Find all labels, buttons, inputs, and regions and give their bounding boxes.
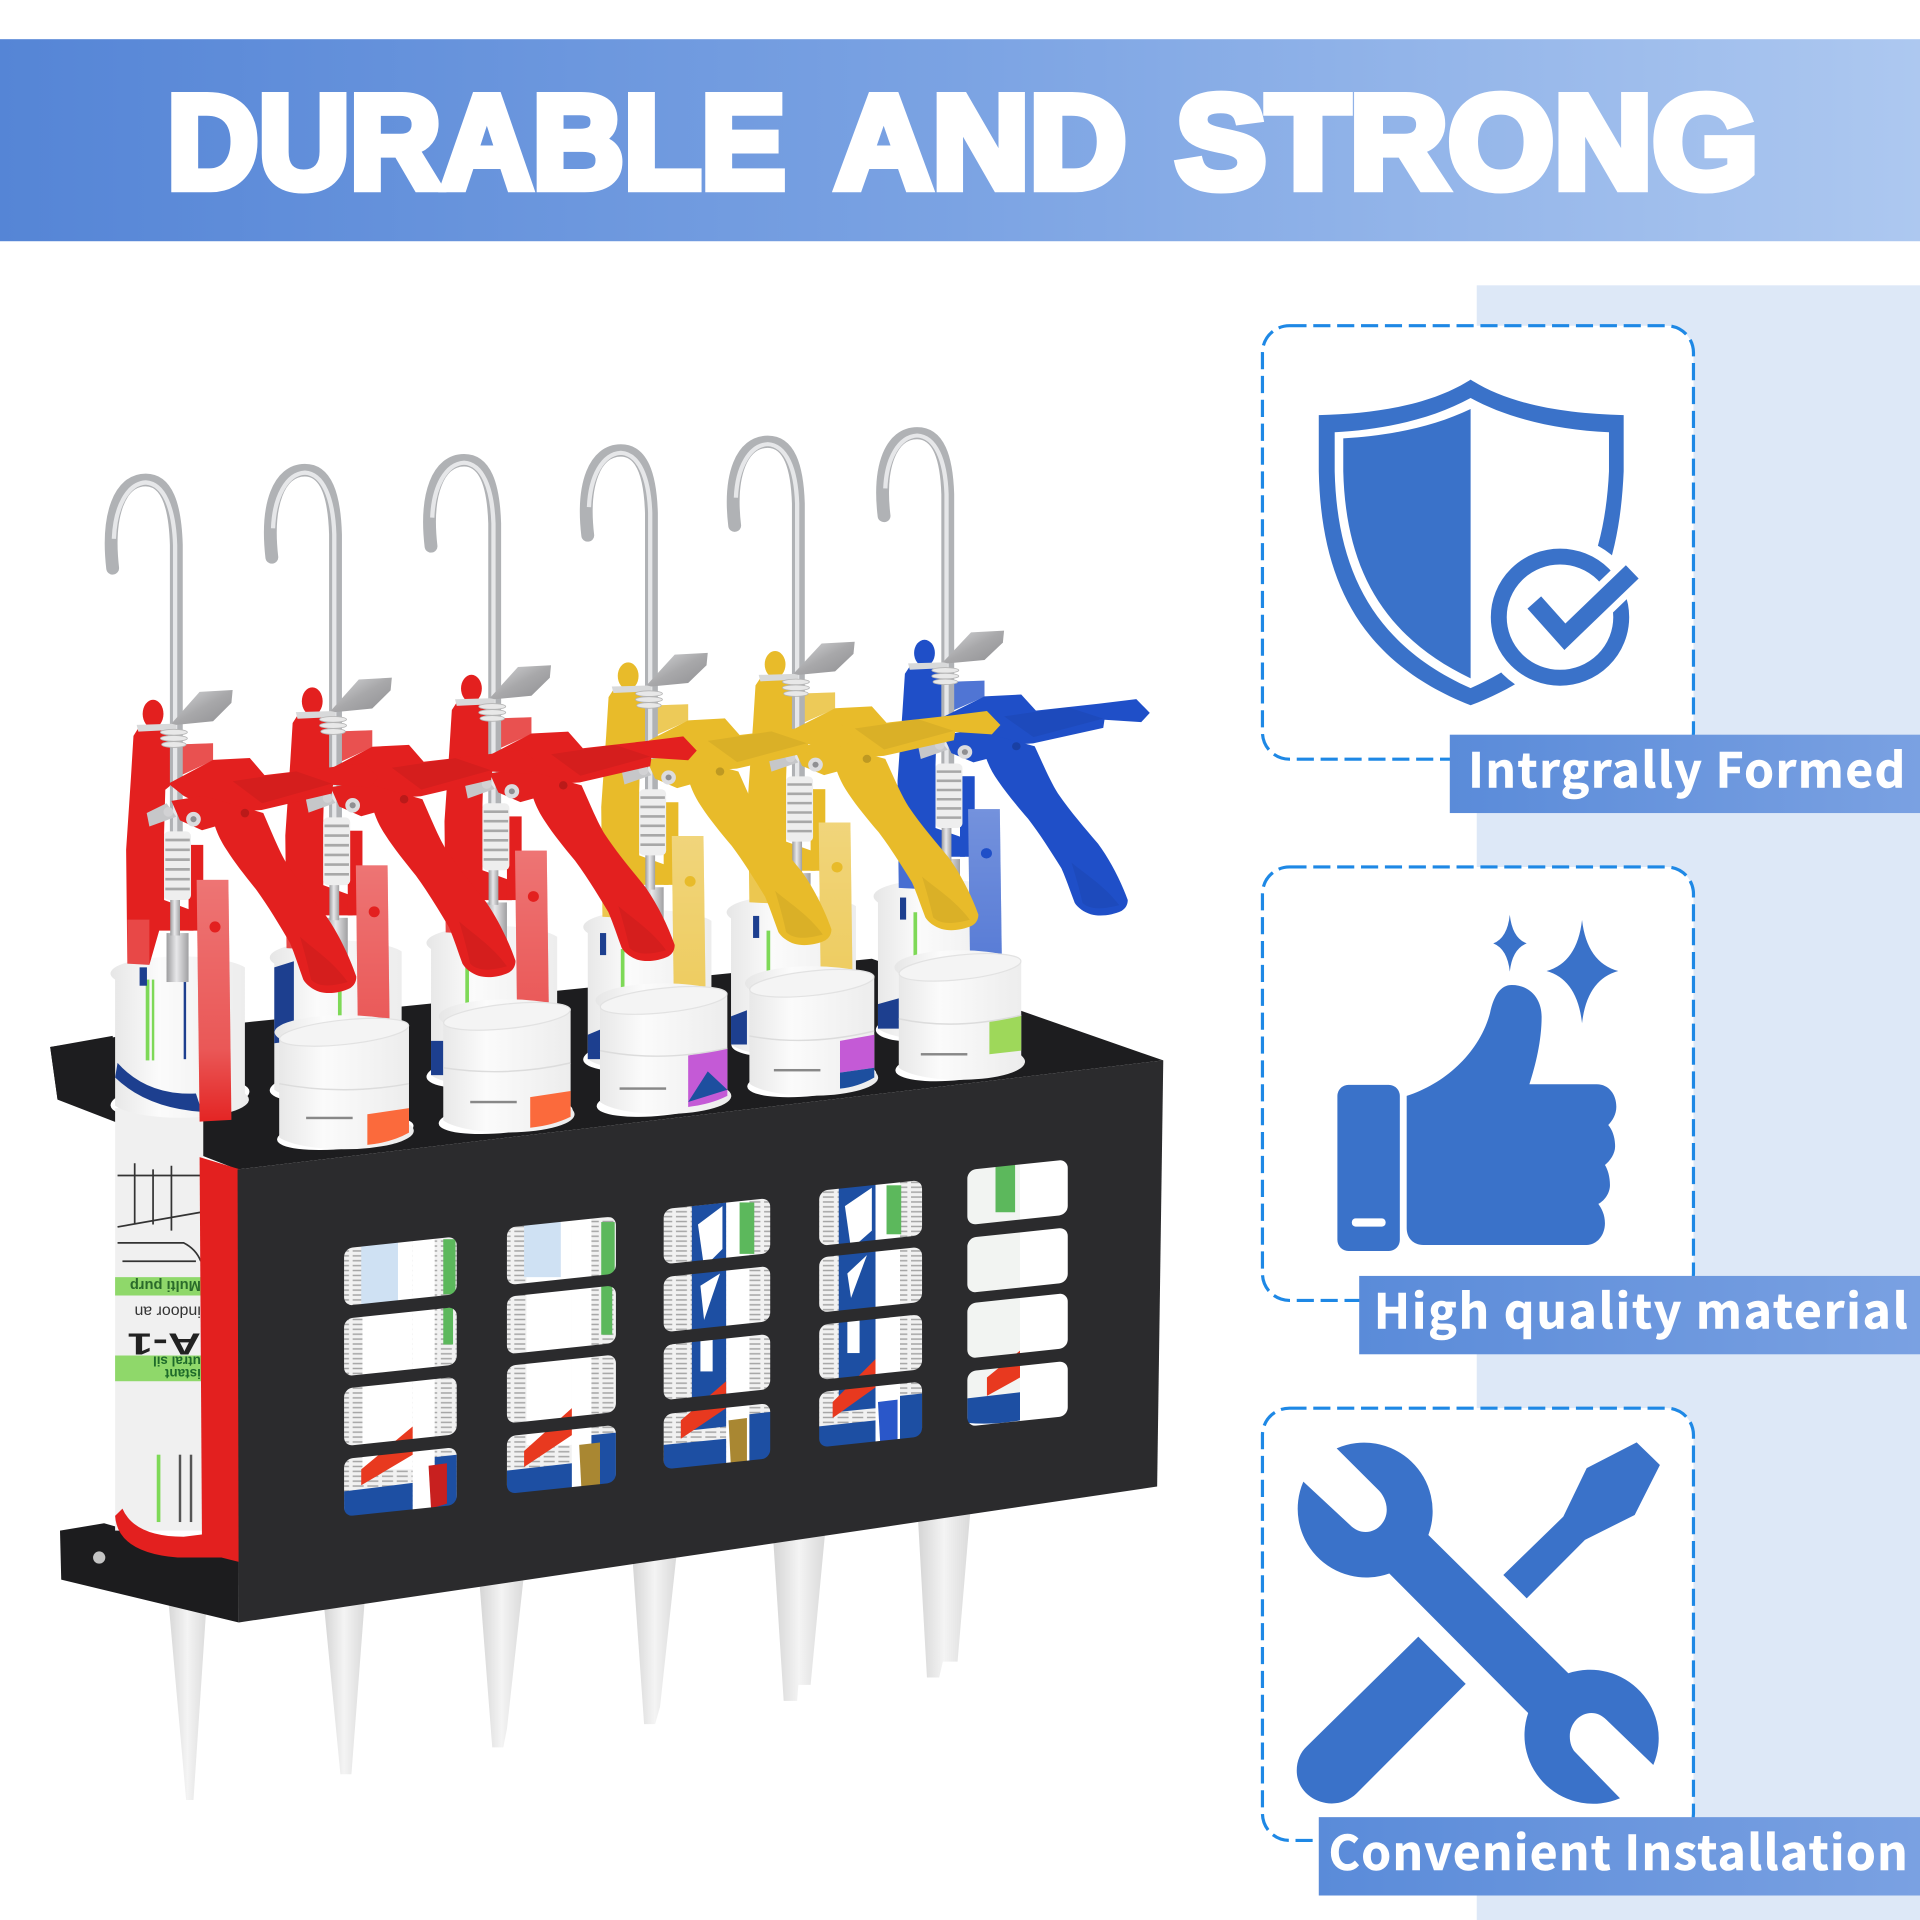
gun 2 red xyxy=(270,470,538,1104)
blue label bands xyxy=(344,1184,1020,1519)
icon: wrench and screwdriver xyxy=(1297,1442,1660,1804)
gun 1 red xyxy=(111,480,378,1122)
back row cartridges xyxy=(110,879,1003,1118)
left cartridge below rack: Multi purp xyxy=(130,1277,201,1293)
dashed card xyxy=(1262,867,1693,1300)
title: STRONG xyxy=(1176,69,1758,216)
cartridge open tops xyxy=(278,949,1022,1051)
left cartridge below rack: A-1 xyxy=(127,1326,201,1360)
title: DURABLE xyxy=(167,69,786,216)
header banner xyxy=(0,39,1920,241)
left cartridge below rack: utral sil xyxy=(153,1354,201,1369)
gun 6 blue xyxy=(883,433,1150,1036)
product: caulking gun rack xyxy=(50,433,1163,1800)
rear flange tabs and lower plate xyxy=(50,1036,239,1622)
label text: High quality material xyxy=(1374,1274,1908,1343)
label bar xyxy=(1359,1276,1920,1354)
rack holes xyxy=(109,1000,1024,1156)
title xyxy=(167,69,1758,216)
gun 3 red xyxy=(430,460,697,1087)
left cartridge below rack: indoor an xyxy=(134,1303,201,1320)
gun feet caps xyxy=(429,1463,447,1509)
feature card: integrally formed xyxy=(1262,326,1920,813)
pale blue side panel xyxy=(1477,285,1920,1920)
left cartridge below rack xyxy=(115,1108,203,1531)
front row cartridges xyxy=(275,949,1025,1149)
dashed card xyxy=(1262,1408,1693,1840)
icon: thumbs up with sparkles xyxy=(1337,915,1618,1251)
back row cartridge markings xyxy=(115,898,917,1112)
feature card: high quality material xyxy=(1262,867,1920,1354)
dashed card xyxy=(1262,326,1693,759)
cartridge colour labels xyxy=(367,1108,409,1145)
feature card: convenient installation xyxy=(1262,1408,1920,1896)
title: AND xyxy=(835,69,1127,216)
gun 4 yellow xyxy=(586,450,853,1069)
left cartridge below rack: istant xyxy=(164,1366,201,1381)
gun 5 yellow xyxy=(733,442,1000,1053)
label text: Intrgrally Formed xyxy=(1468,732,1905,801)
label text: Convenient Installation xyxy=(1329,1815,1908,1884)
white marks on blue bands xyxy=(698,1188,872,1371)
label bar xyxy=(1450,735,1920,813)
nozzles xyxy=(167,1504,971,1800)
cartridges seen through the panel windows xyxy=(344,1151,1020,1519)
rack front panel xyxy=(238,1060,1163,1622)
label bar xyxy=(1319,1817,1920,1896)
rack top plate xyxy=(50,959,1163,1169)
icon: shield with check xyxy=(1319,380,1641,705)
red chevrons xyxy=(361,1351,1020,1485)
left cartridge red base and side strap xyxy=(115,1157,241,1562)
